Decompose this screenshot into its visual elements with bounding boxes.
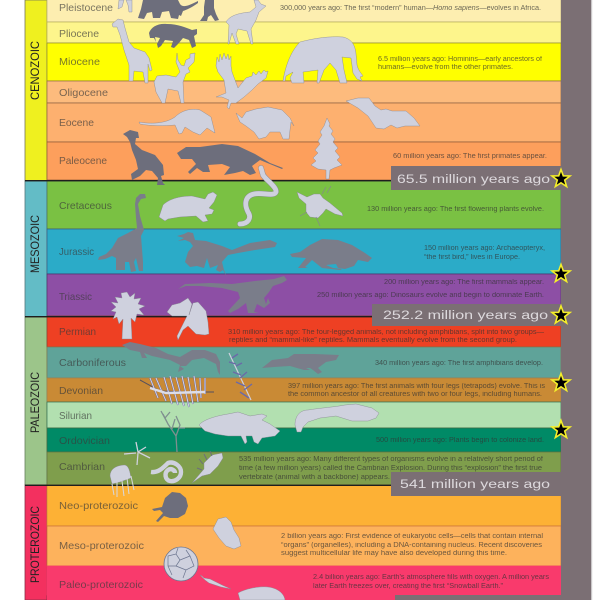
icon: conifer tree xyxy=(311,118,342,179)
icon: eagle xyxy=(216,53,268,109)
icon: protist blob xyxy=(213,517,241,549)
label: 541 million years ago: 541 million years ago xyxy=(400,479,550,491)
event descriptions: 2.4 billion years ago: Earth’s atmosphere fills with oxygen. A million years xyxy=(313,574,550,581)
icon: spiny trilobite-like animal xyxy=(192,451,223,483)
period names: Paleo-proterozoic xyxy=(59,579,143,591)
event descriptions: vertebrate (animal with a backbone) appears. xyxy=(239,474,390,481)
period names: Cambrian xyxy=(59,461,105,473)
mass extinction stars xyxy=(552,170,570,438)
label: 541 million years ago xyxy=(391,472,561,496)
icon: Neoproterozoic organism xyxy=(152,492,188,522)
icon: deer xyxy=(154,53,195,103)
period names: Silurian xyxy=(59,410,92,422)
icon: brittle star xyxy=(124,442,150,465)
icon: creodont mammal xyxy=(177,144,283,175)
event descriptions: 6.5 million years ago: Hominins—early ancestors of xyxy=(378,56,542,63)
icon: elephant xyxy=(283,37,363,83)
icon: sabre-tooth cat xyxy=(149,24,197,48)
event descriptions: 500 million years ago: Plants begin to colonize land. xyxy=(376,437,544,444)
icon: snake xyxy=(240,168,276,224)
event descriptions: humans—evolve from the other primates. xyxy=(378,64,513,71)
period names: Oligocene xyxy=(59,87,108,99)
icon: rhino xyxy=(236,107,294,139)
era column: Proterozoic: PROTEROZOIC xyxy=(30,506,42,583)
icon: jellyfish xyxy=(110,465,134,497)
icon: flying insect xyxy=(297,186,343,226)
era column: Mesozoic xyxy=(25,181,47,317)
event descriptions: 130 million years ago: The first flowering plants evolve. xyxy=(367,206,544,213)
label: 252.2 million years ago xyxy=(372,304,561,326)
event descriptions: 150 million years ago: Archaeopteryx, xyxy=(424,245,545,252)
icon: brachiosaurus xyxy=(98,194,146,272)
icon: archaeopteryx xyxy=(177,232,277,277)
event descriptions: 2 billion years ago: First evidence of eukaryotic cells—cells that contain internal xyxy=(281,533,543,540)
icon: amphibian xyxy=(122,342,220,375)
period names: Pleistocene xyxy=(59,2,113,14)
icon: mammoth xyxy=(138,0,198,19)
event descriptions: 310 million years ago: The four-legged animals, not including amphibians, split into two groups— xyxy=(228,329,544,336)
event descriptions: later Earth freezes over, creating the first “Snowball Earth.” xyxy=(313,583,504,590)
icon: worm organism xyxy=(200,575,231,589)
period names: Carboniferous xyxy=(59,357,126,369)
event descriptions: 535 million years ago: Many different types of organisms evolve in a relatively short period of xyxy=(239,456,543,463)
period names: Paleocene xyxy=(59,155,107,167)
era boundary lines xyxy=(25,180,392,486)
icon: Cooksonia plant xyxy=(161,411,185,452)
period names: Eocene xyxy=(59,117,94,129)
icon: terror bird xyxy=(123,130,165,185)
icon: small theropod dinosaur xyxy=(178,276,287,313)
label: 65.5 million years ago xyxy=(391,166,561,190)
event descriptions: “the first bird,” lives in Europe. xyxy=(424,254,520,261)
event descriptions: 300,000 years ago: The first “modern” human— Homo sapiens —evolves in Africa. xyxy=(280,5,541,12)
period names: Jurassic xyxy=(59,246,94,258)
era column: Mesozoic: MESOZOIC xyxy=(30,215,42,273)
icon: human ancestor xyxy=(200,0,219,21)
icon: spiral shell xyxy=(151,463,181,481)
icon: early tetrapod xyxy=(262,354,339,374)
label: 252.2 million years ago: 252.2 million years ago xyxy=(383,310,548,322)
era column: Paleozoic: PALEOZOIC xyxy=(30,372,42,433)
event descriptions: the common ancestor of all creatures with two or four legs, including humans. xyxy=(288,391,542,398)
event descriptions: time (a few million years) called the Cambrian Explosion. During this “explosion” the first true xyxy=(239,465,542,472)
period names: Ordovician xyxy=(59,435,110,447)
event descriptions: 250 million years ago: Dinosaurs evolve and begin to dominate Earth. xyxy=(317,292,544,299)
icon: bat xyxy=(346,98,420,129)
icon: early mammal xyxy=(290,239,372,270)
event descriptions: “organs” (organelles), including a DNA-containing nucleus. Recent discoveries xyxy=(281,542,543,549)
event descriptions: suggest multicellular life may have also developed during this time. xyxy=(281,550,507,557)
icon: opossum xyxy=(139,109,215,135)
icon: Tiktaalik xyxy=(295,404,379,432)
gray time bar xyxy=(395,0,592,600)
period names xyxy=(59,2,144,591)
period names: Cretaceous xyxy=(59,200,112,212)
period names: Miocene xyxy=(59,56,100,68)
event descriptions xyxy=(228,5,550,590)
icon: bottom blob organism xyxy=(238,587,285,600)
era column: Cenozoic xyxy=(25,0,47,181)
icon: palm tree xyxy=(111,292,145,339)
period names: Neo-proterozoic xyxy=(59,500,138,512)
icon: cell cluster xyxy=(164,547,198,581)
icon: partial human legs xyxy=(118,0,132,12)
icon: fern plant xyxy=(229,353,252,400)
period names: Meso-proterozoic xyxy=(59,540,144,552)
period names: Devonian xyxy=(59,385,103,397)
period names: Triassic xyxy=(59,291,92,303)
icon: turtle xyxy=(159,192,217,222)
icon: giraffe xyxy=(112,19,152,83)
era column: Cenozoic: CENOZOIC xyxy=(30,41,42,100)
icon: centipede xyxy=(140,376,214,407)
event descriptions: reptiles and “mammal-like” reptiles. Mammals eventually evolve from the second group. xyxy=(229,337,517,344)
event descriptions: 340 million years ago: The first amphibians develop. xyxy=(375,360,543,367)
event descriptions: 397 million years ago: The first animals with four legs (tetrapods) evolve. This is xyxy=(288,383,546,390)
event descriptions: 60 million years ago: The first primates appear. xyxy=(393,153,547,160)
icon: ginkgo leaf xyxy=(167,298,209,340)
era column: Proterozoic xyxy=(25,485,47,600)
icon: gazelle xyxy=(226,0,266,44)
label: 65.5 million years ago: 65.5 million years ago xyxy=(397,174,550,186)
period names: Permian xyxy=(59,326,96,338)
era column: Paleozoic xyxy=(25,317,47,485)
event descriptions: 200 million years ago: The first mammals appear. xyxy=(384,279,544,286)
period names: Pliocene xyxy=(59,28,99,40)
icon: lobe-finned fish xyxy=(199,412,280,444)
